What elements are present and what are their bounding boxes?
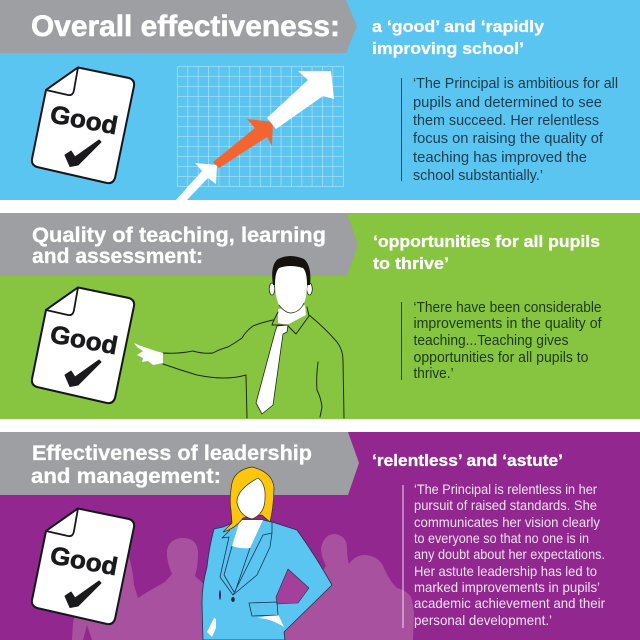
quote: principal is ambitious: them succeed. Her relentless bbox=[413, 113, 599, 129]
icon: good document bbox=[32, 508, 134, 624]
quote: considerable improvements: ‘There have been considerable bbox=[414, 300, 602, 316]
hair bbox=[223, 467, 274, 532]
banner: quality of teaching: Quality of teaching, learning bbox=[32, 224, 326, 247]
quote: considerable improvements: thrive.’ bbox=[414, 366, 454, 382]
quote: relentless in her pursuit: to everyone so that no one is in bbox=[414, 531, 589, 546]
banner: leadership and management bbox=[0, 432, 359, 495]
quote: relentless in her pursuit: communicates her vision clearly bbox=[414, 515, 600, 530]
hair bbox=[272, 256, 310, 285]
quote: relentless in her pursuit: ‘The Principal is relentless in her bbox=[414, 482, 597, 497]
quote: considerable improvements bbox=[401, 300, 602, 382]
silhouettes: crowd bbox=[72, 534, 414, 640]
arm gap bbox=[276, 569, 309, 604]
pocket and hand bbox=[257, 614, 284, 627]
arrow: lower white bbox=[176, 163, 217, 200]
banner: leadership and management: Effectiveness of leadership bbox=[32, 442, 312, 465]
quote: relentless in her pursuit: any doubt about her expectations. bbox=[414, 547, 605, 562]
quote: principal is ambitious: teaching has improved the bbox=[413, 150, 587, 166]
arrow: orange bbox=[213, 119, 273, 168]
banner: leadership and management: and management: bbox=[31, 465, 221, 488]
heading: relentless and astute: ‘relentless’ and ‘astute’ bbox=[372, 451, 563, 470]
figure: principal bbox=[202, 467, 332, 640]
quote: relentless in her pursuit: pursuit of raised standards. She bbox=[414, 498, 597, 513]
banner: overall effectiveness: Overall effectiveness: bbox=[31, 10, 340, 43]
icon: good document: Good bbox=[48, 100, 120, 140]
banner: quality of teaching: and assessment: bbox=[32, 245, 203, 268]
heading: a good and rapidly improving school: a ‘good’ and ‘rapidly bbox=[372, 17, 545, 36]
quote: principal is ambitious: focus on raising the quality of bbox=[413, 131, 604, 147]
grid bbox=[178, 66, 344, 186]
quote: considerable improvements: opportunities for all pupils to bbox=[414, 350, 588, 366]
heading: opportunities for all pupils bbox=[373, 232, 600, 273]
quote: principal is ambitious: school substantially.’ bbox=[413, 168, 543, 184]
panel: overall effectiveness bbox=[0, 0, 640, 200]
quote: relentless in her pursuit: academic achievement and their bbox=[414, 596, 605, 611]
icon: good document: Good bbox=[48, 320, 120, 360]
quote: relentless in her pursuit: personal development.’ bbox=[414, 613, 552, 628]
heading: a good and rapidly improving school: improving school’ bbox=[372, 39, 524, 58]
heading: opportunities for all pupils: to thrive’ bbox=[373, 254, 449, 273]
panel: quality of teaching bbox=[0, 213, 640, 419]
figure: teacher pointing bbox=[134, 256, 344, 418]
panel: leadership and management bbox=[0, 432, 640, 640]
icon: good document bbox=[32, 288, 134, 403]
arrow: upper white bbox=[267, 71, 334, 129]
quote: considerable improvements: teaching...Teaching gives bbox=[414, 333, 568, 349]
quote: considerable improvements: improvements in the quality of bbox=[414, 316, 602, 332]
lapels bbox=[220, 522, 272, 595]
banner: overall effectiveness bbox=[0, 0, 357, 53]
face bbox=[237, 478, 265, 519]
banner: quality of teaching bbox=[0, 213, 358, 276]
quote: principal is ambitious: ‘The Principal is ambitious for all bbox=[413, 76, 618, 92]
quote: relentless in her pursuit bbox=[402, 482, 605, 628]
quote: relentless in her pursuit: marked improvements in pupils’ bbox=[414, 580, 600, 595]
icon: good document: Good bbox=[48, 541, 120, 581]
jacket bbox=[202, 520, 332, 640]
quote: principal is ambitious bbox=[401, 76, 618, 184]
shirt outline bbox=[163, 315, 344, 418]
hand bbox=[134, 343, 163, 365]
ears and face bbox=[269, 283, 275, 295]
collar bbox=[272, 307, 309, 334]
quote: relentless in her pursuit: Her astute leadership has led to bbox=[414, 564, 597, 579]
heading: a good and rapidly improving school bbox=[372, 17, 545, 58]
chart: rising arrows on grid bbox=[176, 66, 344, 200]
icon: good document bbox=[32, 68, 134, 183]
heading: opportunities for all pupils: ‘opportunities for all pupils bbox=[373, 232, 600, 251]
chest bbox=[232, 520, 263, 548]
button bbox=[231, 597, 235, 602]
tie bbox=[256, 325, 288, 414]
quote: principal is ambitious: pupils and determined to see bbox=[413, 95, 602, 111]
